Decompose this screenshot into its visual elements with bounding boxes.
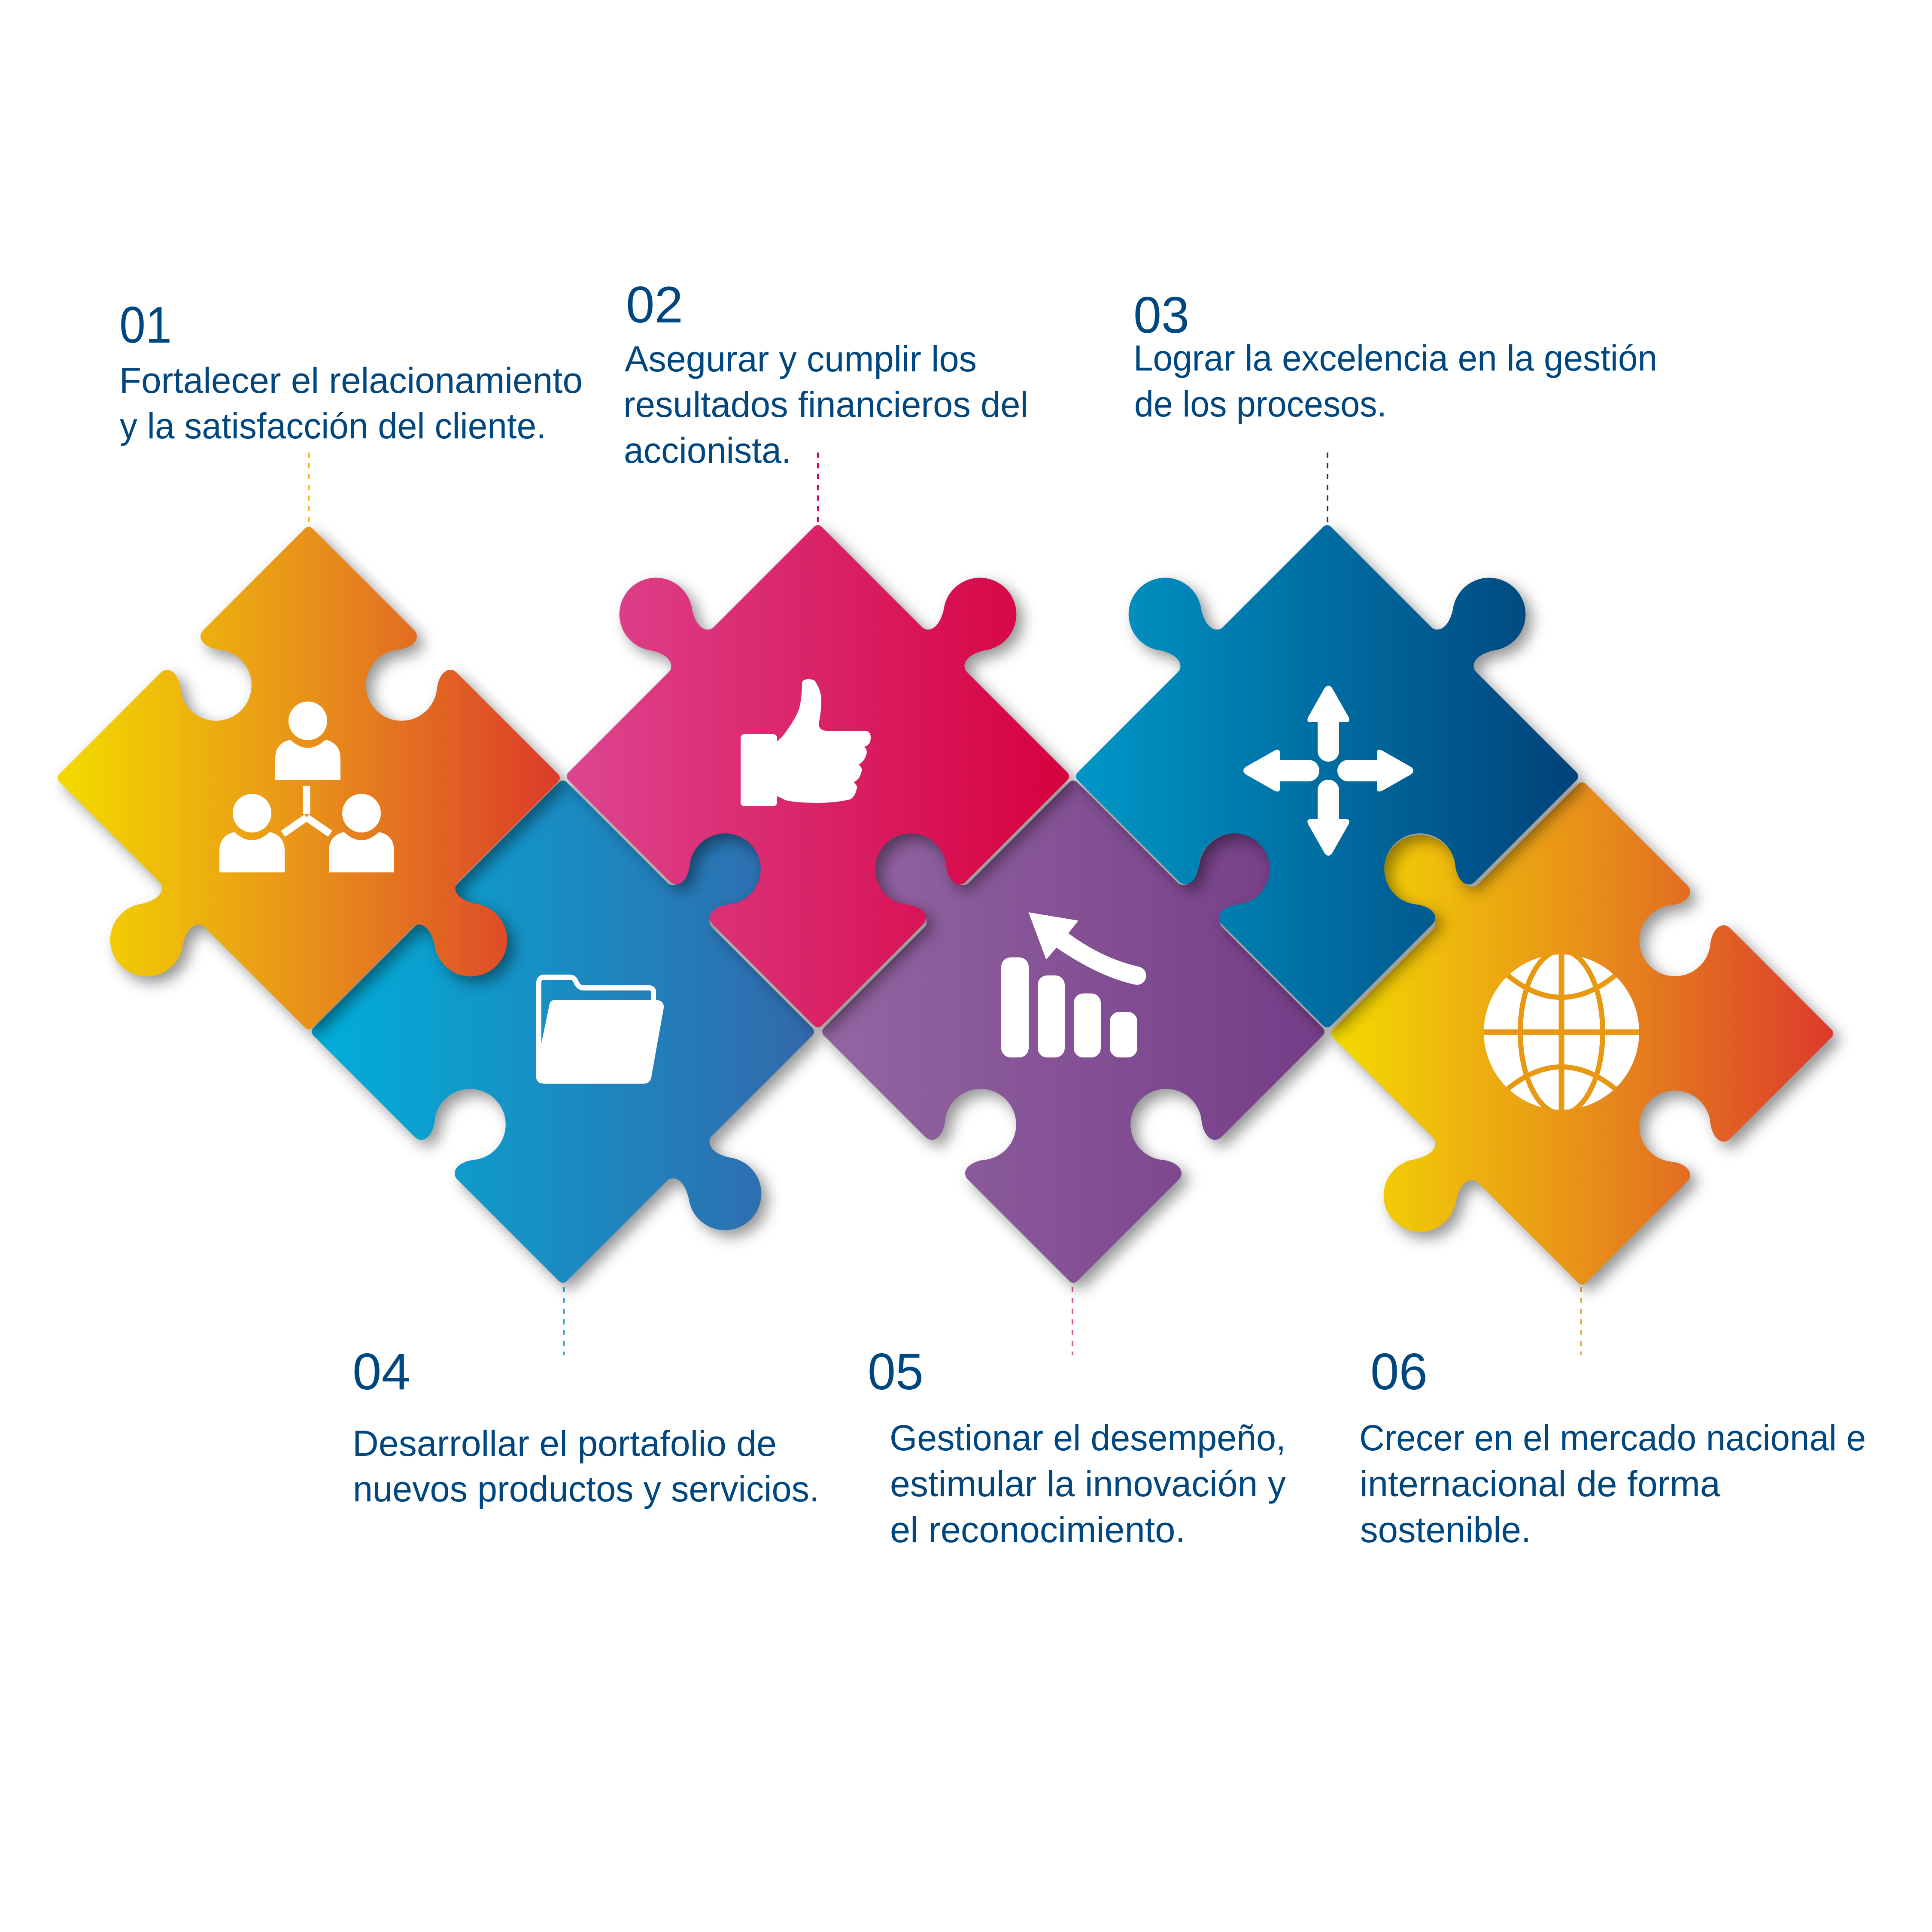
dashed connector 06: [1580, 1287, 1582, 1355]
description 02: resultados financieros del: [623, 384, 1028, 425]
icon: globe: [1480, 951, 1643, 1114]
number 01: 01: [119, 296, 172, 354]
puzzle piece 05: performance: [822, 781, 1324, 1283]
description 01: y la satisfacción del cliente.: [120, 406, 546, 446]
puzzle piece 01: people: [58, 527, 560, 1029]
text block 05: [868, 1343, 1286, 1550]
dashed connector 02: [817, 453, 819, 525]
description 05: Gestionar el desempeño,: [890, 1418, 1286, 1458]
dashed connector 03: [1327, 453, 1328, 525]
description 01: [119, 360, 583, 446]
icon: folder: [536, 977, 664, 1084]
text block 06: [1359, 1343, 1866, 1550]
description 02: [623, 339, 1028, 471]
description 05: estimular la innovación y: [890, 1464, 1286, 1504]
description 03: de los procesos.: [1134, 384, 1387, 424]
description 06: [1359, 1418, 1866, 1550]
description 03: Lograr la excelencia en la gestión: [1133, 338, 1657, 378]
dashed connector 05: [1072, 1287, 1073, 1355]
description 02: accionista.: [624, 430, 791, 471]
description 06: internacional de forma: [1360, 1464, 1720, 1504]
number 05: 05: [868, 1343, 923, 1400]
number 03: 03: [1133, 286, 1189, 344]
puzzle piece 03: four arrows: [1076, 525, 1578, 1027]
description 04: Desarrollar el portafolio de: [352, 1423, 777, 1464]
description 02: Asegurar y cumplir los: [625, 339, 977, 379]
description 06: sostenible.: [1360, 1510, 1531, 1550]
description 03: [1133, 338, 1657, 424]
number 06: 06: [1370, 1343, 1428, 1400]
icon: four directional arrows: [1243, 686, 1413, 856]
text block 02: [623, 276, 1028, 471]
number 02: 02: [626, 276, 683, 334]
text block 01: [119, 296, 583, 446]
description 05: el reconocimiento.: [890, 1510, 1185, 1550]
puzzle piece 04: folder: [312, 781, 814, 1283]
description 05: [890, 1418, 1286, 1550]
icon: bars with arrow: [1001, 912, 1146, 1057]
icon: connected people: [219, 702, 394, 872]
text block 03: [1133, 286, 1657, 424]
description 06: Crecer en el mercado nacional e: [1359, 1418, 1866, 1458]
text block 04: [352, 1343, 819, 1509]
icon: thumbs up: [741, 679, 871, 806]
description 04: [352, 1423, 819, 1509]
puzzle piece 02: thumbs up: [567, 525, 1069, 1027]
description 04: nuevos productos y servicios.: [353, 1469, 819, 1509]
number 04: 04: [352, 1343, 410, 1400]
dashed connector 04: [563, 1287, 565, 1355]
description 01: Fortalecer el relacionamiento: [119, 360, 583, 401]
dashed connector 01: [308, 453, 310, 526]
puzzle piece 06: globe: [1331, 782, 1833, 1285]
